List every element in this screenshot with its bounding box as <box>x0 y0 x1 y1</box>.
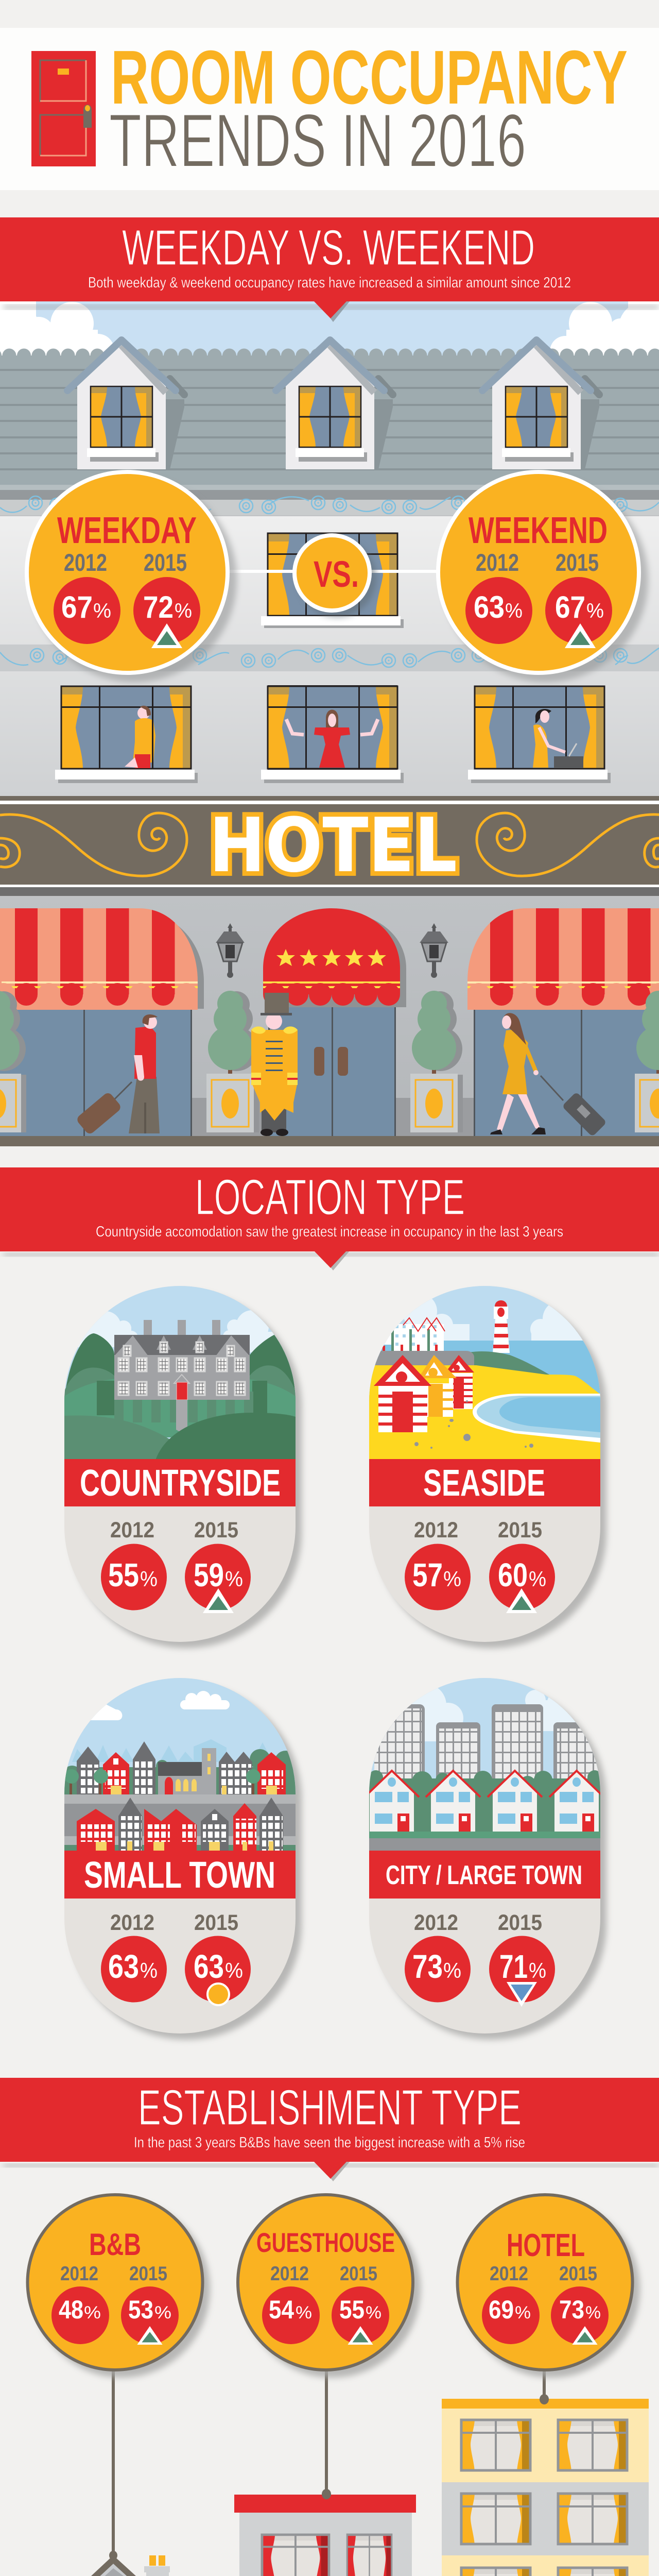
upper row houses <box>77 1741 286 1794</box>
banner: location type <box>0 1167 659 1270</box>
stat 2012 <box>262 2286 320 2344</box>
stat 2012 <box>405 1936 471 2002</box>
lower row houses <box>77 1798 283 1851</box>
stat 2015: 72 <box>143 590 174 624</box>
stat 2015: % <box>529 1958 546 1982</box>
stat 2015: 73 <box>559 2295 584 2324</box>
beach huts <box>374 1355 474 1432</box>
years: 2015 <box>498 1518 542 1543</box>
stat 2015: 55 <box>339 2295 365 2324</box>
doors <box>0 1002 659 1136</box>
panel: seaside: SEASIDE <box>423 1463 545 1504</box>
stat 2012: 73 <box>412 1948 443 1985</box>
years: 2012 <box>476 549 519 576</box>
label: B&B <box>89 2227 141 2262</box>
stat 2012: 48 <box>59 2295 83 2324</box>
name band <box>64 1851 296 1899</box>
sky and clouds <box>0 301 659 368</box>
topiary planters <box>0 991 659 1132</box>
panel: countryside: COUNTRYSIDE <box>80 1463 281 1504</box>
years <box>414 1910 542 1935</box>
stat 2015 <box>551 2286 609 2345</box>
years: 2015 <box>559 2263 597 2285</box>
label: HOTEL <box>507 2228 585 2263</box>
woman with suitcase <box>490 1013 607 1137</box>
years: 2012 <box>270 2263 309 2285</box>
stat 2012: 55 <box>108 1556 139 1594</box>
years <box>270 2263 377 2285</box>
subheading: Both weekday & weekend occupancy rates have increased a similar amount since 2012 <box>88 275 571 291</box>
banner: weekday vs weekend <box>0 217 659 322</box>
pebbles <box>414 1400 533 1449</box>
stat 2015: % <box>225 1567 243 1591</box>
stat 2015: % <box>175 600 192 622</box>
stat 2015 <box>185 1544 251 1613</box>
doorman <box>251 993 298 1136</box>
stat 2012: % <box>296 2303 312 2323</box>
stat 2012 <box>405 1544 471 1611</box>
years: 2012 <box>414 1910 458 1935</box>
stat 2015 <box>545 577 612 648</box>
panel: city / large town <box>365 1678 606 2040</box>
stat 2015 <box>121 2286 179 2345</box>
frieze swirls lower <box>0 648 659 667</box>
icon: red door <box>31 51 96 166</box>
label weekday: WEEKDAY <box>57 510 197 551</box>
stat 2012: 67 <box>61 590 93 624</box>
stat 2012: % <box>93 600 111 622</box>
illustration: city <box>365 1678 604 1853</box>
years <box>60 2263 167 2285</box>
dormer 1 <box>67 340 184 469</box>
stat 2015: % <box>154 2303 171 2323</box>
panel: seaside <box>369 1286 606 1648</box>
illustration: guesthouse building <box>234 2495 416 2576</box>
years <box>476 549 599 576</box>
stat 2012 <box>101 1544 167 1611</box>
name band <box>369 1851 600 1899</box>
name band <box>64 1459 296 1506</box>
header band <box>0 28 659 190</box>
years: 2012 <box>64 549 107 576</box>
stat 2015: % <box>585 2303 601 2323</box>
banner: establishment type <box>0 2078 659 2181</box>
stat 2012: 63 <box>108 1948 139 1985</box>
stat 2015 <box>133 577 200 648</box>
stat 2015: 71 <box>499 1948 528 1985</box>
roof wall <box>0 348 659 500</box>
illustration: b&b house <box>27 2555 201 2576</box>
stat 2015: % <box>586 600 604 622</box>
stat 2015: 53 <box>128 2295 153 2324</box>
pole: hotel <box>540 2370 549 2404</box>
dormer 2 <box>276 340 393 469</box>
stat 2012 <box>482 2286 540 2344</box>
illustration: town <box>63 1678 297 1853</box>
stat 2012 <box>54 577 120 644</box>
stat 2015 <box>332 2286 389 2345</box>
stat 2015: 59 <box>194 1556 224 1594</box>
years: 2012 <box>60 2263 98 2285</box>
years: 2012 <box>414 1518 458 1543</box>
stat 2012: % <box>84 2303 101 2323</box>
dormer 3 <box>482 340 599 469</box>
stat 2015: % <box>529 1567 546 1591</box>
stat 2012: % <box>515 2303 531 2323</box>
stat 2012 <box>465 577 532 644</box>
years <box>110 1518 238 1543</box>
stat 2012 <box>51 2286 109 2344</box>
section: weekday vs weekend scene <box>0 301 659 1146</box>
awning left <box>0 908 206 1011</box>
badge: b&b <box>28 2195 210 2378</box>
stat 2015: 60 <box>498 1556 528 1594</box>
years: 2012 <box>110 1910 154 1935</box>
panel: countryside <box>64 1286 302 1648</box>
connector line <box>229 570 437 573</box>
vs circle <box>294 535 376 617</box>
title <box>109 35 628 182</box>
years: 2015 <box>144 549 187 576</box>
years <box>414 1518 542 1543</box>
years <box>64 549 187 576</box>
stat 2012: % <box>443 1958 461 1982</box>
stat 2012: % <box>140 1567 158 1591</box>
stat 2012: 63 <box>474 590 505 624</box>
building upper facade <box>0 500 659 516</box>
lamps <box>216 923 448 978</box>
subheading: Countryside accomodation saw the greatest increase in occupancy in the last 3 years <box>96 1224 563 1240</box>
stat 2015: % <box>366 2303 381 2323</box>
years: 2015 <box>194 1910 238 1935</box>
panel: small town: SMALL TOWN <box>84 1855 275 1896</box>
stat 2015 <box>489 1544 555 1613</box>
illustration: beach <box>369 1286 600 1461</box>
window: woman opening curtains <box>268 685 397 770</box>
awning right <box>463 908 659 1011</box>
street trees <box>65 1769 261 1794</box>
awning centre with stars <box>263 908 406 1007</box>
years: 2015 <box>194 1518 238 1543</box>
pavement <box>0 1136 659 1146</box>
window: woman with laptop <box>475 686 604 769</box>
window sill woman <box>261 770 404 783</box>
terraced houses <box>365 1771 604 1832</box>
stat 2012: 57 <box>412 1556 443 1594</box>
stat 2012: 69 <box>489 2295 514 2324</box>
pole: b&b <box>109 2370 117 2560</box>
illustration: manor house <box>64 1286 296 1463</box>
illustration: hotel building <box>439 2399 651 2576</box>
stat 2012 <box>101 1936 167 2002</box>
years: 2015 <box>129 2263 167 2285</box>
pole: guesthouse <box>322 2370 331 2499</box>
stat 2015 <box>489 1936 555 2007</box>
lighthouse <box>493 1300 510 1353</box>
sign lettering: HOTEL <box>209 802 457 889</box>
weekday circle <box>27 472 237 682</box>
years: 2015 <box>498 1910 542 1935</box>
panel: city / large town: CITY / LARGE TOWN <box>386 1860 582 1890</box>
stat 2015: 67 <box>555 590 585 624</box>
hotel terrace <box>383 1318 445 1351</box>
subheading: In the past 3 years B&Bs have seen the biggest increase with a 5% rise <box>134 2134 525 2151</box>
frieze swirls upper <box>0 496 659 514</box>
years: 2015 <box>556 549 599 576</box>
badge: hotel <box>457 2195 640 2378</box>
stat 2015 <box>185 1936 251 2005</box>
label: GUESTHOUSE <box>256 2228 395 2258</box>
sign scrollwork <box>0 813 659 876</box>
window sill laptop <box>468 770 611 783</box>
stat 2015: % <box>225 1958 243 1982</box>
name band <box>369 1459 600 1506</box>
ground floor <box>0 887 659 1136</box>
lower facade <box>0 515 659 796</box>
hotel sign <box>0 796 659 889</box>
label weekend: WEEKEND <box>469 510 608 551</box>
window: man <box>61 686 191 769</box>
panel: small town <box>63 1678 302 2040</box>
stat 2012: % <box>505 600 523 622</box>
stat 2012: 54 <box>269 2295 294 2324</box>
window sill man <box>55 770 198 783</box>
man with suitcase <box>75 1014 160 1136</box>
years <box>110 1910 238 1935</box>
stat 2015: 63 <box>194 1948 224 1985</box>
window: VS <box>261 533 404 628</box>
years <box>490 2263 597 2285</box>
heading: LOCATION TYPE <box>195 1169 465 1225</box>
vs circle: VS. <box>314 554 359 595</box>
years: 2012 <box>490 2263 528 2285</box>
years: 2012 <box>110 1518 154 1543</box>
weekend circle <box>438 472 648 682</box>
stat 2012: % <box>140 1958 158 1982</box>
badge: guesthouse <box>238 2195 421 2378</box>
years: 2015 <box>340 2263 377 2285</box>
stat 2012: % <box>443 1567 461 1591</box>
